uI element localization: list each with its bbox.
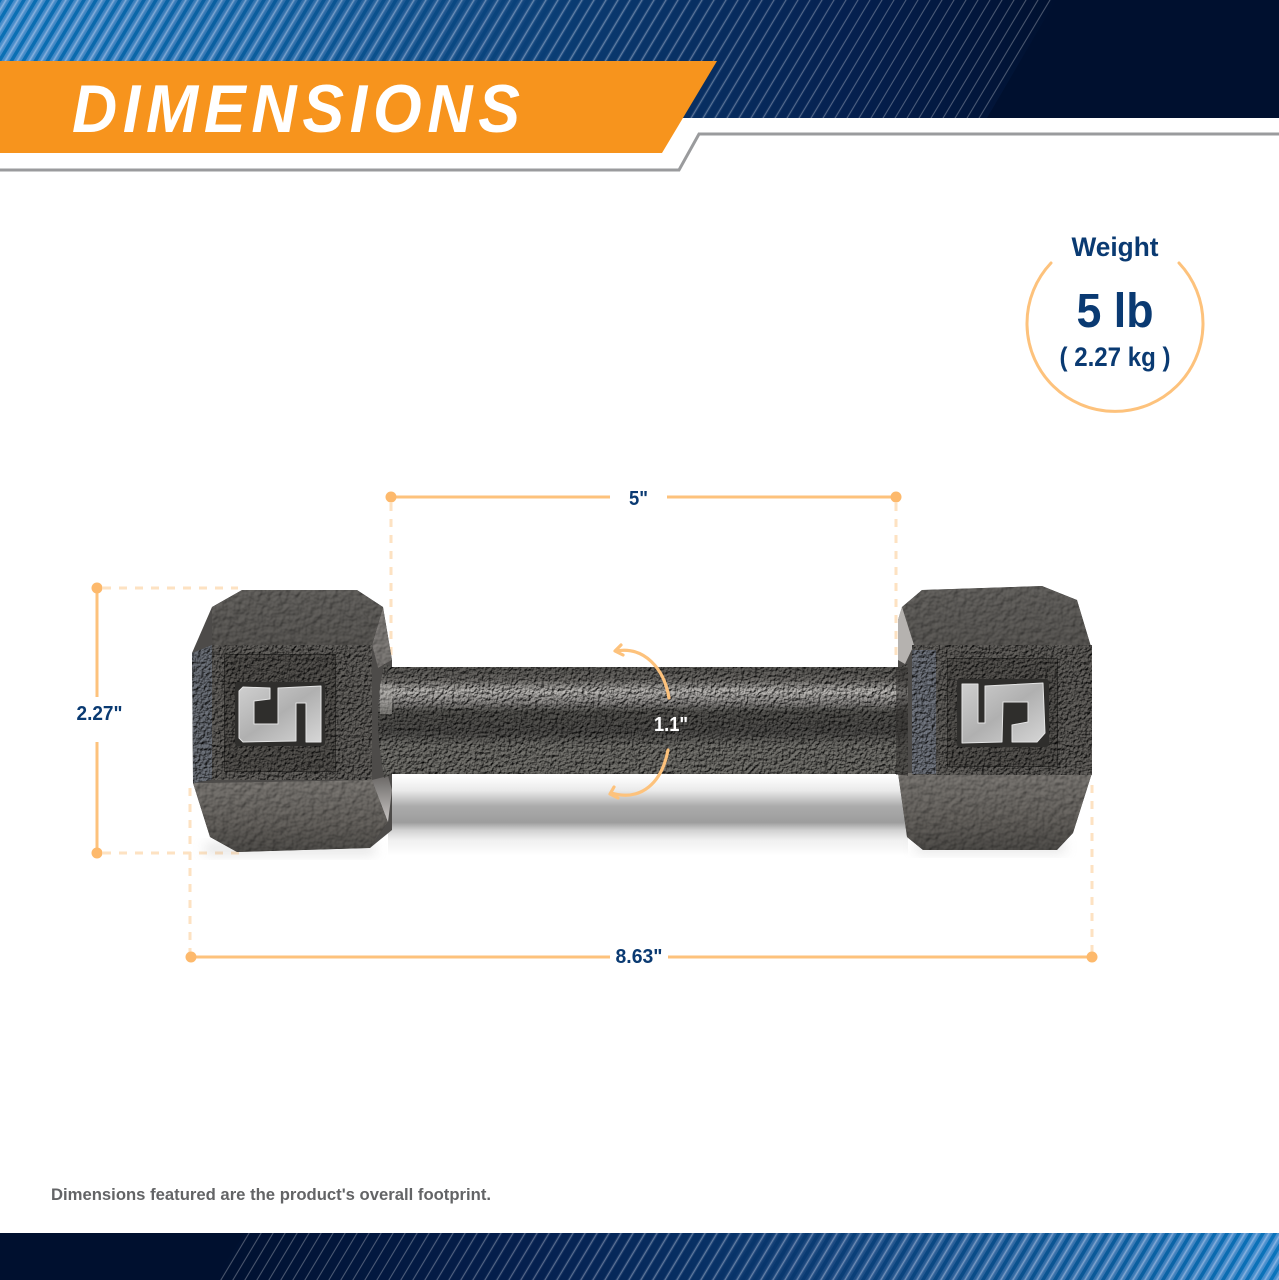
digit 5 left (239, 686, 321, 742)
handle diameter arrows and label (610, 645, 688, 798)
dashed guide lines (103, 503, 1092, 952)
overall length dimension: 8.63 in (186, 946, 1098, 968)
horizontal dimension: 5 in (386, 488, 902, 510)
left hex head (192, 590, 392, 852)
right hex head (898, 586, 1092, 850)
title banner (0, 61, 717, 153)
digit 5 right (962, 683, 1045, 743)
overall length dimension: 8.63 in: 8.63" (616, 946, 662, 968)
footnote: Dimensions featured are the product's overall footprint. (51, 1186, 491, 1204)
header band (0, 0, 1279, 118)
horizontal dimension: 5 in: 5" (629, 488, 648, 510)
header outline stroke (0, 134, 1279, 170)
vertical dimension: 2.27 in (76, 582, 122, 858)
ground shadow (205, 776, 1065, 856)
weight badge: 5 lb (1076, 285, 1154, 338)
handle diameter arrows and label: 1.1" (654, 714, 688, 736)
weight badge (1027, 232, 1203, 411)
footer band (0, 1233, 1279, 1280)
vertical dimension: 2.27 in: 2.27" (76, 703, 122, 725)
weight badge: Weight (1072, 232, 1158, 262)
weight badge: ( 2.27 kg ) (1060, 342, 1170, 372)
handle (378, 664, 908, 778)
dumbbell photo illustration (192, 586, 1092, 856)
title: DIMENSIONS (72, 71, 520, 147)
